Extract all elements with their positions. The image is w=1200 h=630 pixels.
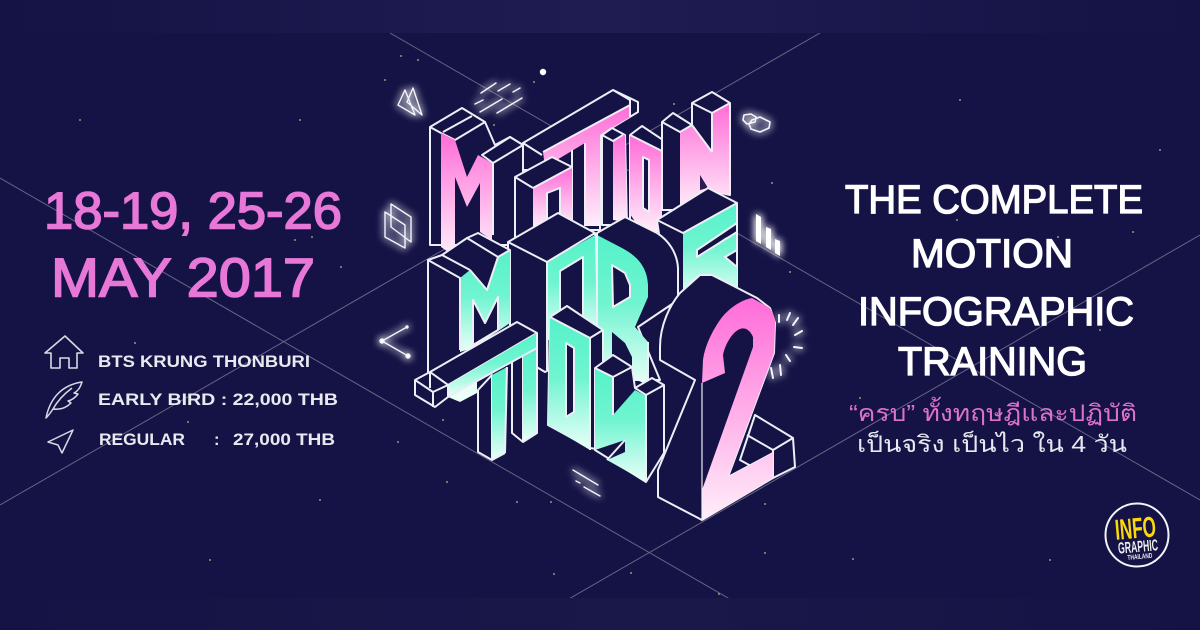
icon: house: [45, 336, 83, 368]
right title: THE COMPLETE: [845, 178, 1143, 222]
Thai tagline: เป็นจริง เป็นไว ใน 4 วัน: [857, 429, 1127, 457]
letter: O (pink): [515, 157, 572, 240]
Thai tagline: [849, 397, 1137, 457]
icon: triangles: [398, 88, 422, 115]
icon: connected nodes: [380, 326, 410, 358]
regular price: :: [214, 431, 220, 449]
isometric title: MOTION MORE TION 2: [415, 90, 795, 520]
numeral: 2: [658, 275, 795, 520]
regular price: [99, 431, 335, 449]
icon: small lines: [573, 470, 600, 496]
icon: navigation arrow: [48, 430, 73, 453]
letter: R (teal): [597, 217, 678, 385]
dot: [540, 69, 546, 75]
letter: T (pink): [523, 90, 638, 230]
right title: [845, 178, 1143, 384]
date heading: 18-19, 25-26: [44, 182, 342, 240]
regular price: 27,000 THB: [233, 431, 335, 449]
letter: O (pink): [630, 126, 672, 232]
date heading: [44, 182, 342, 308]
icon: radial dial ticks: [771, 313, 802, 378]
icon: feather: [46, 382, 82, 418]
letter: M (pink): [430, 108, 523, 257]
date heading: MAY 2017: [51, 246, 315, 308]
letter: T (teal): [415, 322, 537, 460]
decorative glowing icons: [380, 83, 802, 496]
icon: hexagons: [743, 114, 770, 132]
venue text: BTS KRUNG THONBURI: [98, 353, 310, 371]
right title: TRAINING: [898, 340, 1087, 384]
logo: Infographic Thailand: [1106, 504, 1168, 566]
letter: N (pink): [662, 92, 730, 210]
logo: Infographic Thailand: INFO: [1114, 511, 1157, 547]
event details list: [45, 336, 338, 453]
regular price: REGULAR: [99, 431, 185, 449]
letter: I (pink): [602, 128, 627, 225]
letter: O (teal): [508, 213, 597, 372]
letter: O (teal lower): [548, 306, 603, 450]
letter: E (teal): [657, 188, 737, 310]
icon: bars: [756, 214, 780, 256]
Thai tagline: “ครบ” ทั้งทฤษฎีและปฏิบัติ: [849, 397, 1137, 426]
letter: M (teal): [428, 233, 510, 375]
logo: Infographic Thailand: GRAPHIC: [1117, 537, 1159, 558]
right title: MOTION: [911, 232, 1073, 276]
letter: N (teal lower): [595, 355, 664, 482]
icon: dashes: [475, 83, 522, 113]
icon: overlapping squares: [385, 204, 411, 248]
right title: INFOGRAPHIC: [858, 290, 1134, 334]
early bird price: EARLY BIRD : 22,000 THB: [98, 391, 338, 409]
logo: Infographic Thailand: THAILAND: [1127, 553, 1153, 562]
